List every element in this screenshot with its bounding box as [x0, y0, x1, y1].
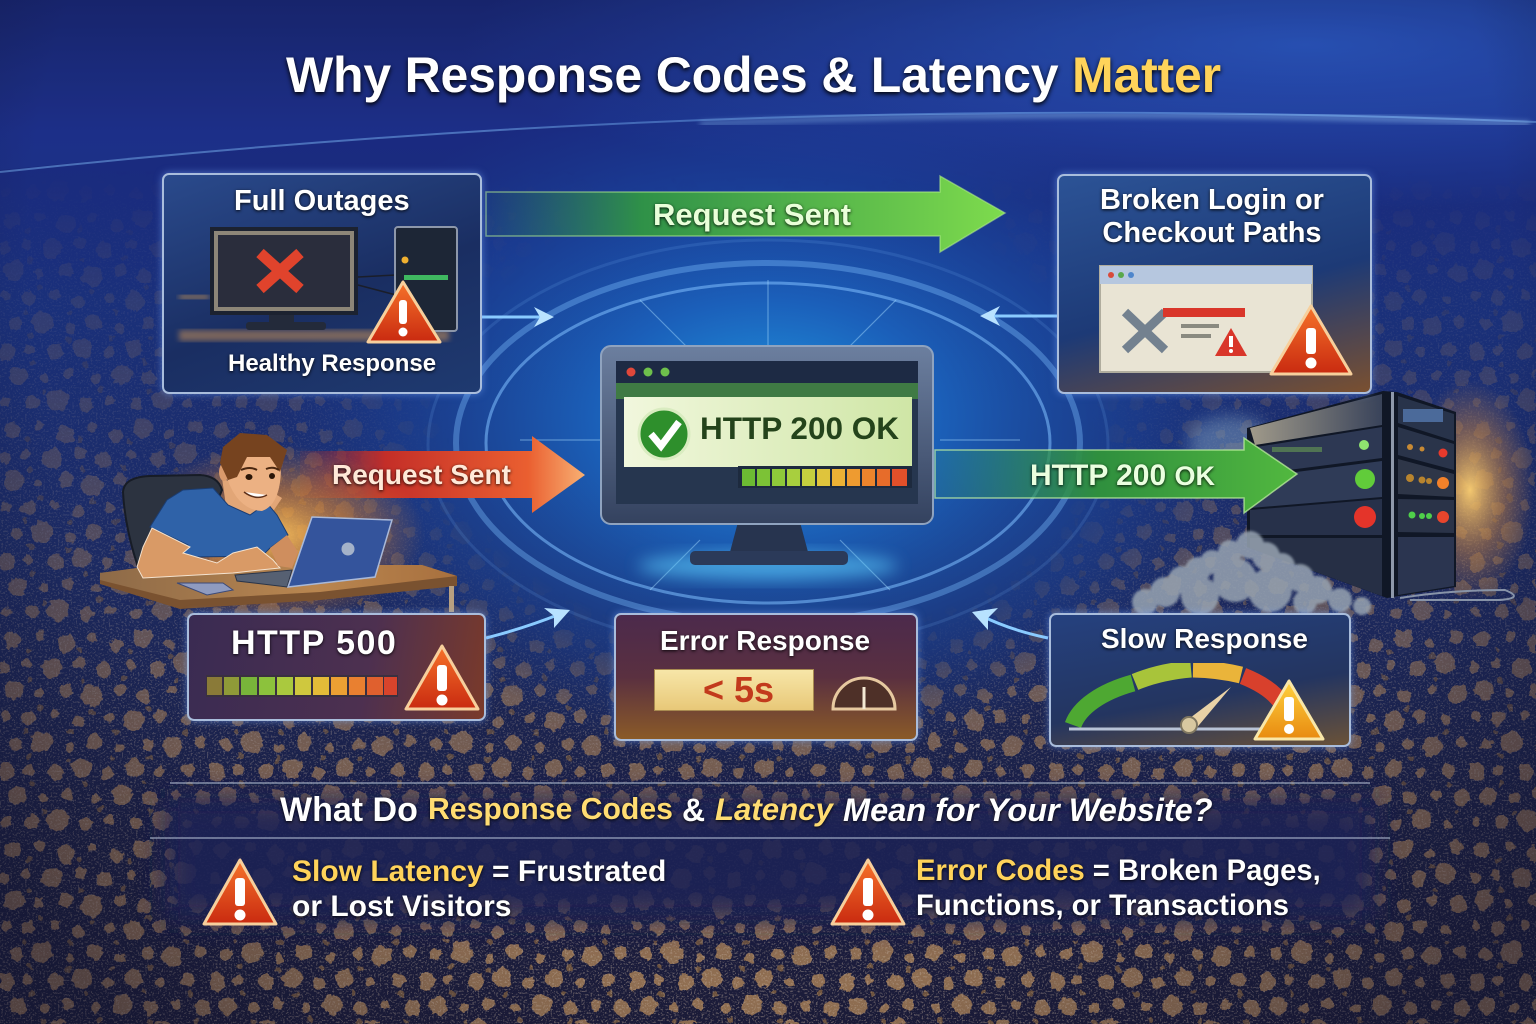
footer heading	[278, 791, 1214, 830]
badge: under 5 seconds	[654, 669, 814, 711]
center monitor	[601, 346, 933, 580]
arrow label: request sent red: Request Sent	[332, 459, 511, 490]
callout: slow latency	[202, 855, 666, 926]
heading: broken login: Checkout Paths	[1102, 217, 1322, 249]
footer heading: Mean for Your Website?	[843, 792, 1213, 828]
callout text	[916, 855, 1321, 922]
callout text: Error Codes = Broken Pages,	[916, 855, 1321, 887]
footer heading: What Do	[280, 791, 418, 829]
speckled ground texture	[0, 216, 1536, 1024]
panel: broken login	[1057, 174, 1372, 394]
footer rules	[150, 783, 1390, 838]
green response arrow	[935, 438, 1297, 513]
callout text: or Lost Visitors	[292, 890, 512, 923]
arrow label: HTTP 200 OK: HTTP 200 OK	[1030, 459, 1215, 492]
title: Why Response Codes & Latency Matter	[286, 47, 1221, 103]
footer heading: &	[682, 792, 705, 828]
icon: monitor with red cross and warning	[176, 226, 458, 344]
chart: colored latency bar	[206, 675, 398, 697]
horizon glow	[0, 0, 1536, 172]
footer heading: Response Codes	[428, 793, 673, 826]
label: healthy response: Healthy Response	[228, 350, 436, 377]
panel: full outages	[162, 173, 482, 394]
footer dark band	[165, 798, 1375, 920]
panel: error response	[614, 613, 918, 741]
heading: broken login	[1100, 184, 1326, 249]
server glow and clouds	[1190, 380, 1534, 600]
heading: full outages: Full Outages	[234, 185, 410, 217]
heading: error response: Error Response	[660, 625, 870, 656]
server rack	[1247, 391, 1514, 600]
panel: HTTP 500	[187, 613, 486, 721]
callout: error codes	[830, 855, 1321, 926]
icon: warning	[202, 858, 278, 926]
icon: mini gauge	[832, 676, 896, 710]
callout text: Functions, or Transactions	[916, 890, 1289, 922]
callout text	[291, 855, 666, 923]
orbit rings	[428, 240, 1108, 650]
heading: HTTP 500: HTTP 500	[231, 624, 397, 662]
panel: slow response	[1049, 613, 1351, 747]
icon: warning triangle	[404, 644, 480, 710]
footer heading: Latency	[715, 792, 833, 827]
icon: gauge with warning	[1065, 663, 1324, 740]
connector arrows	[482, 306, 1058, 638]
red request arrow	[300, 436, 585, 513]
callout text: Slow Latency = Frustrated	[292, 855, 666, 888]
badge text: < 5s	[703, 669, 774, 710]
heading: broken login: Broken Login or	[1100, 184, 1324, 216]
arrow label: request sent green: Request Sent	[653, 197, 851, 232]
heading: slow response: Slow Response	[1101, 623, 1308, 654]
cloud	[1132, 531, 1371, 615]
monitor label: HTTP 200 OK: HTTP 200 OK	[700, 410, 899, 446]
green request arrow	[486, 176, 1005, 252]
person at laptop	[100, 433, 457, 625]
radiating rays	[520, 280, 1020, 590]
icon: browser window with warning	[1099, 265, 1352, 376]
icon: warning	[830, 858, 906, 926]
